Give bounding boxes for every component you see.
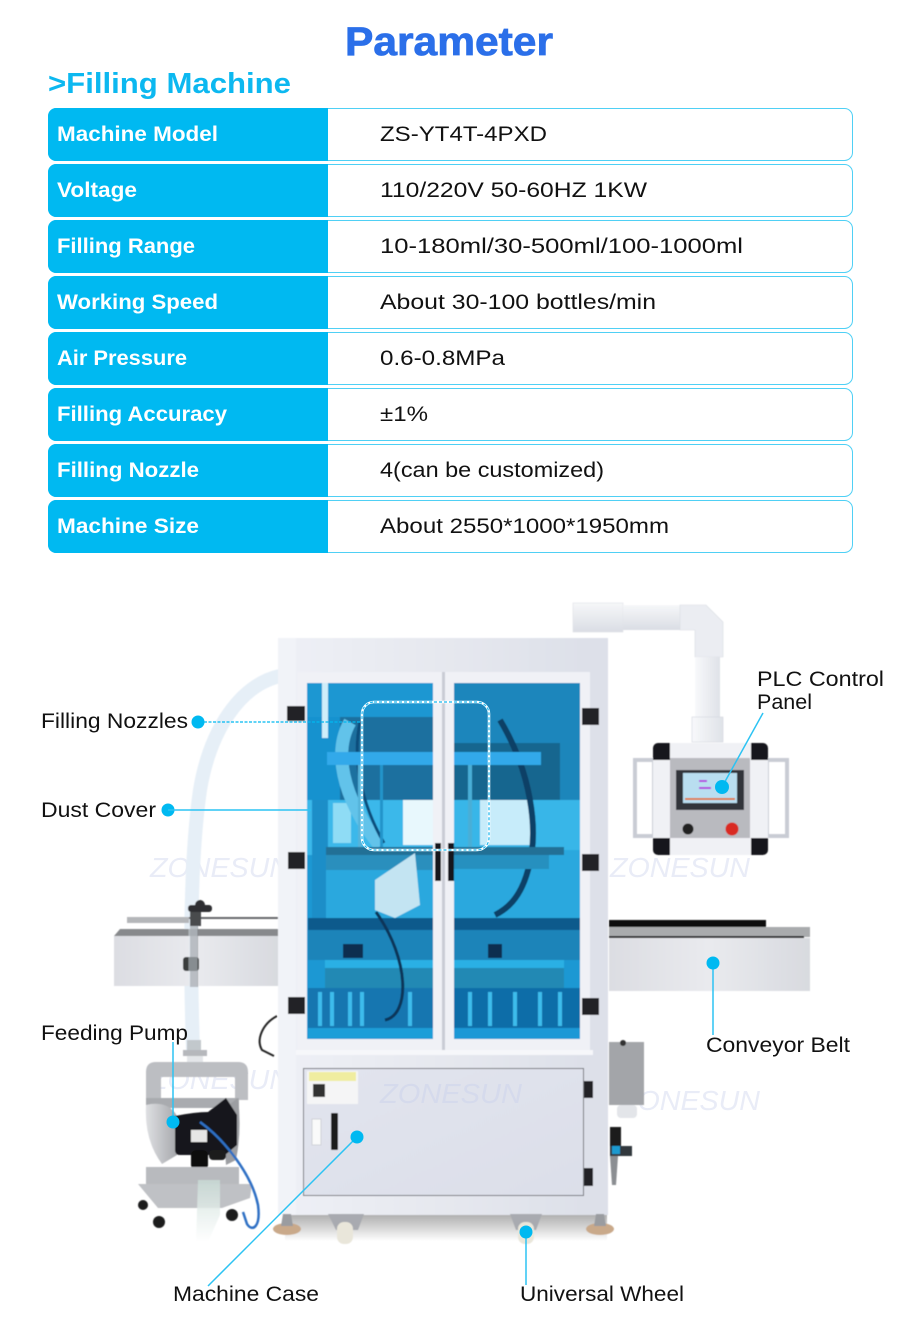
door handles — [435, 843, 454, 881]
row: filling accuracy — [48, 388, 852, 441]
row: machine model: ZS-YT4T-4PXD — [380, 123, 547, 146]
callout: machine case — [173, 1130, 364, 1306]
row: filling accuracy: ±1% — [380, 403, 428, 426]
row: air pressure: 0.6-0.8MPa — [380, 347, 505, 370]
diaphragm pump — [138, 1040, 259, 1242]
callout: dust cover: Dust Cover — [41, 799, 156, 822]
callout: machine case: Machine Case — [173, 1283, 319, 1306]
row: working speed: About 30-100 bottles/min — [380, 291, 656, 314]
right conveyor — [609, 920, 810, 991]
row: voltage: Voltage — [57, 179, 137, 202]
row: working speed: Working Speed — [57, 291, 218, 314]
row: machine size: About 2550*1000*1950mm — [380, 515, 669, 538]
parameter table — [48, 108, 852, 553]
section heading: >Filling Machine — [48, 68, 291, 100]
row: filling range: Filling Range — [57, 235, 195, 258]
hinges — [287, 706, 599, 1186]
callout: filling nozzles: Filling Nozzles — [41, 710, 188, 733]
junction box and air valve — [609, 1040, 644, 1185]
row: filling range: 10-180ml/30-500ml/100-1000ml — [380, 235, 743, 258]
callout: conveyor belt: Conveyor Belt — [706, 1034, 850, 1057]
watermark: centre: ZONESUN — [379, 1078, 523, 1109]
control arm — [573, 603, 723, 742]
left glass door — [307, 683, 433, 1039]
row: voltage: 110/220V 50-60HZ 1KW — [380, 179, 647, 202]
machine frame — [278, 638, 608, 1215]
watermarks: ZONESUN — [619, 1085, 761, 1116]
callout: feeding pump: Feeding Pump — [41, 1022, 188, 1045]
row: filling nozzle: 4(can be customized) — [380, 459, 604, 482]
watermarks — [149, 852, 761, 1116]
floor shadow — [285, 1213, 607, 1241]
row: air pressure — [48, 332, 852, 385]
title: Parameter — [345, 20, 553, 64]
watermarks: ZONESUN — [609, 852, 751, 883]
callout: plc control panel — [715, 668, 884, 794]
row: voltage — [48, 164, 852, 217]
callout: universal wheel — [520, 1226, 684, 1306]
cable — [260, 1016, 277, 1056]
watermarks: ZONESUN — [149, 852, 291, 883]
row: machine size: Machine Size — [57, 515, 199, 538]
row: machine size — [48, 500, 852, 553]
right glass door — [454, 683, 580, 1039]
callout: plc control panel: Panel — [757, 691, 812, 714]
row: filling accuracy: Filling Accuracy — [57, 403, 227, 426]
row: machine model: Machine Model — [57, 123, 218, 146]
callout: feeding pump — [41, 1022, 188, 1128]
row: filling nozzle: Filling Nozzle — [57, 459, 199, 482]
callout: dust cover — [41, 799, 311, 822]
row: filling nozzle — [48, 444, 852, 497]
callout: conveyor belt — [706, 956, 850, 1057]
row: air pressure: Air Pressure — [57, 347, 187, 370]
callout: universal wheel: Universal Wheel — [520, 1283, 684, 1306]
row: working speed — [48, 276, 852, 329]
watermarks: ZONESUN — [149, 1064, 291, 1095]
feed hose — [191, 676, 280, 1050]
plc control box — [635, 743, 787, 855]
callout: filling nozzles — [41, 702, 489, 850]
row: filling range — [48, 220, 852, 273]
left conveyor — [114, 900, 278, 1050]
machine illustration — [114, 603, 810, 1244]
cabinet door — [304, 1068, 584, 1196]
row: machine model — [48, 108, 852, 161]
callout: plc control panel: PLC Control — [757, 668, 884, 691]
feet and wheels — [273, 1214, 614, 1244]
